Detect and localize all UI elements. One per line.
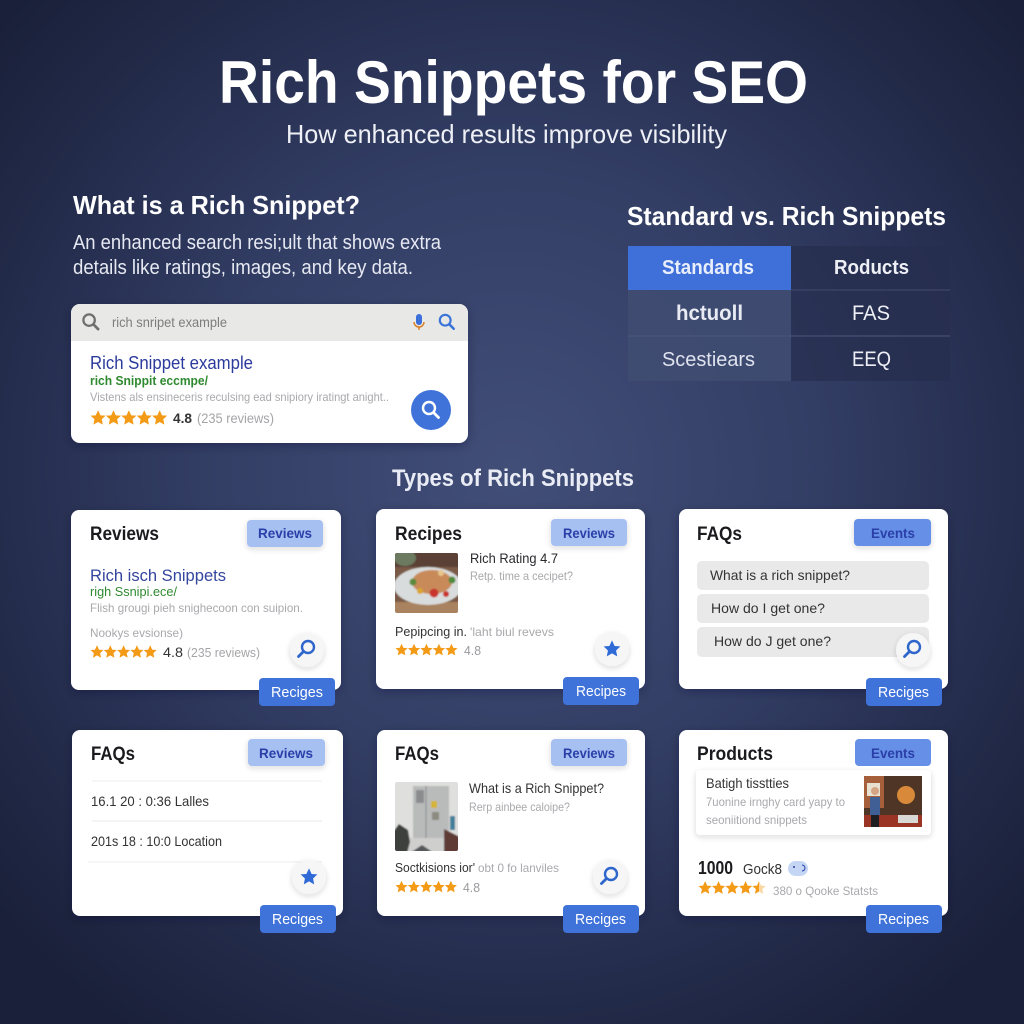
comparison table: Scestiears [662, 349, 755, 371]
inner product card: 7uonine irnghy card yapy to [706, 795, 845, 809]
definition text: An enhanced search resi;ult that shows extra [73, 232, 442, 254]
panel: search result example: Vistens als ensineceris reculsing ead snipiory iratingt anight.. [90, 390, 389, 404]
card: reviews: Reciges [271, 684, 323, 701]
card: recipes [376, 509, 645, 705]
card: recipes: 4.8 [464, 643, 481, 658]
card: faqs events: Reviews [259, 745, 313, 761]
panel: search result example: rich Snippit eccmpe/ [90, 373, 208, 388]
comparison table: Roducts [834, 257, 909, 279]
card: faqs events: Reciges [272, 911, 323, 928]
heading: types of rich snippets: Types of Rich Snippets [392, 465, 634, 492]
card: faqs with image [377, 730, 645, 933]
card: reviews: (235 reviews) [187, 645, 260, 660]
card: faqs with image: Reviews [563, 745, 615, 761]
card: faqs list: Events [871, 525, 915, 541]
panel: search result example [71, 304, 468, 443]
card: reviews: Flish grougi pieh snighecoon con suipion. [90, 601, 303, 615]
card: faqs with image: Rerp ainbee caloipe? [469, 800, 570, 814]
card: faqs list: FAQs [697, 524, 742, 545]
card: reviews: 4.8 [163, 644, 183, 660]
card: products: Recipes [878, 911, 929, 928]
card: faqs list: How do J get one? [714, 633, 831, 649]
card: reviews: righ Ssnipi.ece/ [90, 584, 177, 599]
definition text: details like ratings, images, and key data. [73, 257, 413, 279]
image: office door [395, 782, 458, 851]
card: faqs list [679, 509, 948, 706]
card: reviews [71, 510, 341, 706]
definition text [73, 232, 442, 279]
subtitle: How enhanced results improve visibility [286, 119, 727, 149]
comparison table: Standards [662, 257, 754, 279]
inner product card: seoniitiond snippets [706, 813, 807, 827]
card: faqs events: FAQs [91, 744, 135, 765]
heading: what is a rich snippet: What is a Rich Snippet? [73, 190, 360, 220]
comparison table [628, 246, 950, 381]
comparison table: FAS [852, 302, 890, 325]
card: faqs events: 16.1 20 : 0:36 Lalles [91, 793, 209, 809]
card: recipes: Reviews [563, 525, 615, 541]
card: recipes: Pepipcing in. [395, 624, 467, 639]
card: faqs list: How do I get one? [711, 600, 825, 616]
card: reviews: Rich isch Snippets [90, 566, 226, 585]
card: faqs events: 201s 18 : 10:0 Location [91, 833, 222, 849]
card: reviews: Reviews [258, 525, 312, 541]
inner product card: Batigh tisstties [706, 775, 789, 791]
card: faqs events [72, 730, 343, 933]
card: faqs list: What is a rich snippet? [710, 567, 850, 583]
heading: standard vs rich: Standard vs. Rich Snippets [627, 201, 946, 231]
card: recipes: Recipes [395, 524, 462, 545]
title: Rich Snippets for SEO [219, 49, 808, 116]
card: products [679, 730, 948, 933]
card: products: Gock8 [743, 861, 782, 878]
card: faqs with image: obt 0 fo lanviles [478, 861, 559, 875]
card: faqs with image: Reciges [575, 911, 626, 928]
card: faqs with image: FAQs [395, 744, 439, 765]
comparison table: hctuoll [676, 302, 743, 325]
card: faqs list: Reciges [878, 684, 929, 701]
card: products: Events [871, 745, 915, 761]
panel: search result example: Rich Snippet example [90, 353, 253, 373]
card: recipes: Rich Rating 4.7 [470, 550, 558, 566]
card: products: Products [697, 744, 773, 765]
panel: search result example: rich snripet example [112, 314, 227, 330]
image: food plate [395, 553, 458, 613]
card: products: 380 o Qooke Statsts [773, 884, 878, 898]
comparison table: EEQ [852, 348, 891, 371]
card: recipes: Recipes [576, 683, 626, 700]
card: faqs with image: 4.8 [463, 880, 480, 895]
card: faqs with image: What is a Rich Snippet? [469, 780, 604, 796]
card: reviews: Nookys evsionse) [90, 626, 183, 640]
inner product card [696, 770, 931, 835]
panel: search result example: (235 reviews) [197, 410, 274, 426]
card: products: 1000 [698, 858, 733, 878]
panel: search result example: 4.8 [173, 410, 192, 426]
card: recipes: Retp. time a cecipet? [470, 569, 573, 583]
card: faqs with image: Soctkisions ior' [395, 860, 475, 875]
card: reviews: Reviews [90, 524, 159, 545]
card: recipes: 'laht biul revevs [470, 625, 554, 639]
